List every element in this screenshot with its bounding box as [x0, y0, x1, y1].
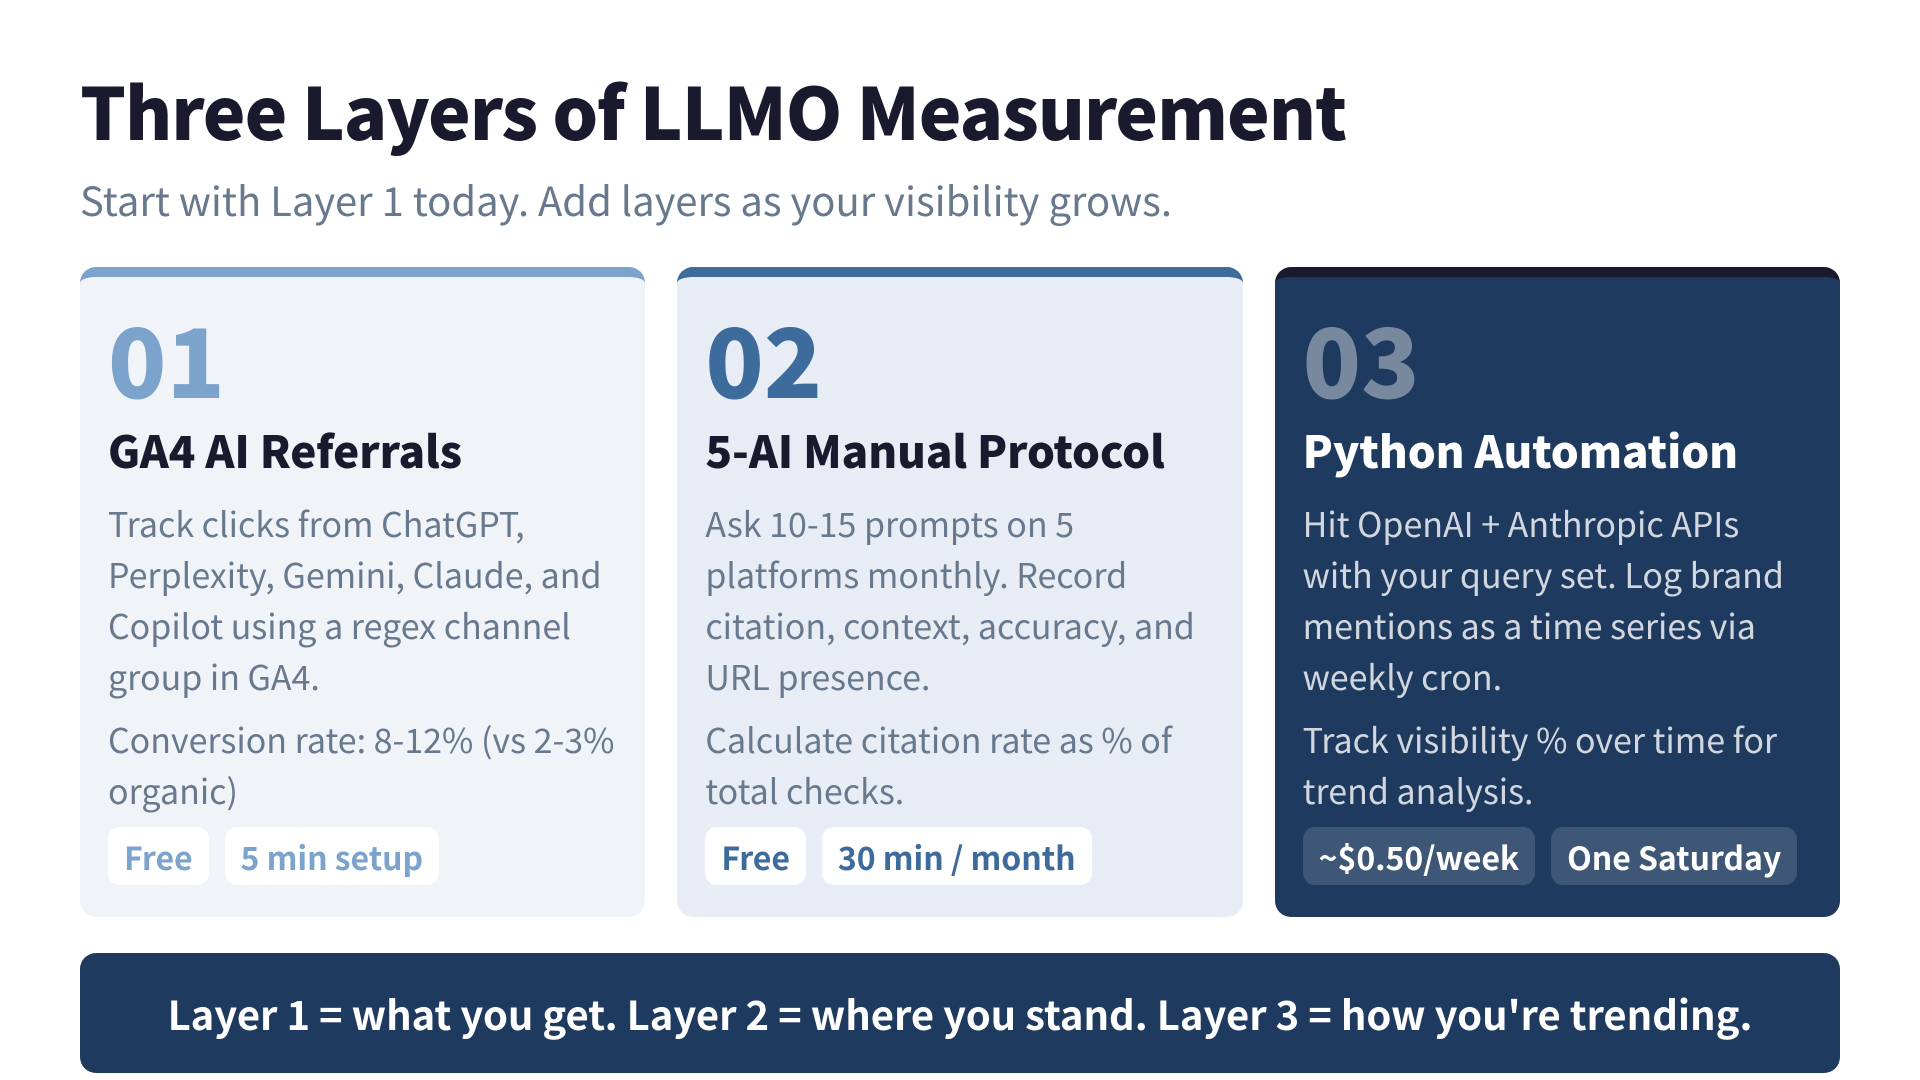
heading: Python Automation: Python Automation — [1303, 417, 1738, 481]
tags: layer 3: One Saturday — [1567, 834, 1781, 880]
tags: layer 2: 30 min / month — [838, 834, 1076, 880]
text: layer 1 description: group in GA4. — [108, 651, 320, 700]
tags: layer 3: ~$0.50/week — [1319, 834, 1519, 880]
panel: layer 3 Python Automation — [1275, 267, 1840, 917]
text: visibility tracking — [1303, 714, 1778, 814]
text: layer 3 description: weekly cron. — [1303, 651, 1502, 700]
text: conversion rate — [108, 714, 614, 814]
text: visibility tracking: Track visibility % over time for — [1303, 714, 1777, 763]
number 01: 01 — [108, 287, 225, 426]
text: layer 2 description: Ask 10-15 prompts on 5 — [705, 498, 1074, 547]
text: citation rate: total checks. — [705, 765, 904, 814]
tags: layer 1: 5 min setup — [241, 834, 423, 880]
text: citation rate — [705, 714, 1173, 814]
text: conversion rate: Conversion rate: 8-12% (vs 2-3% — [108, 714, 614, 763]
text: layer 1 description: Copilot using a regex channel — [108, 600, 571, 649]
text: conversion rate: organic) — [108, 765, 238, 814]
text: visibility tracking: trend analysis. — [1303, 765, 1533, 814]
title: Three Layers of LLMO Measurement — [80, 56, 1346, 161]
text: layer 1 description — [108, 498, 602, 700]
tags: layer 2: Free — [721, 834, 790, 880]
text: layer 1 description: Perplexity, Gemini, Claude, and — [108, 549, 602, 598]
text: layer 2 description — [705, 498, 1195, 700]
text: citation rate: Calculate citation rate as % of — [705, 714, 1172, 763]
text: layer 2 description: URL presence. — [705, 651, 930, 700]
tags: layer 2 — [705, 827, 1092, 885]
panel: layer 2 5-AI Manual Protocol — [677, 267, 1243, 917]
text: layer 3 description: Hit OpenAI + Anthropic APIs — [1303, 498, 1739, 547]
heading: 5-AI Manual Protocol: 5-AI Manual Protocol — [705, 417, 1165, 481]
text: layer 1 description: Track clicks from ChatGPT, — [108, 498, 525, 547]
text: layer 3 description: mentions as a time series via — [1303, 600, 1756, 649]
banner: summary — [80, 953, 1840, 1073]
tags: layer 3 — [1303, 827, 1797, 885]
tags: layer 1 — [108, 827, 439, 885]
tags: layer 1: Free — [124, 834, 193, 880]
number 03: 03 — [1303, 287, 1420, 426]
number 02: 02 — [705, 287, 822, 426]
text: layer 3 description — [1303, 498, 1784, 700]
heading: GA4 AI Referrals: GA4 AI Referrals — [108, 417, 462, 481]
text: layer 2 description: platforms monthly. Record — [705, 549, 1127, 598]
subtitle: Start with Layer 1 today. Add layers as your visibility grows. — [80, 170, 1172, 228]
panel: layer 1 GA4 AI Referrals — [80, 267, 645, 917]
text: layer 3 description: with your query set. Log brand — [1303, 549, 1784, 598]
banner: summary: Layer 1 = what you get. Layer 2 = where you stand. Layer 3 = how you're trending. — [168, 984, 1752, 1042]
text: layer 2 description: citation, context, accuracy, and — [705, 600, 1195, 649]
